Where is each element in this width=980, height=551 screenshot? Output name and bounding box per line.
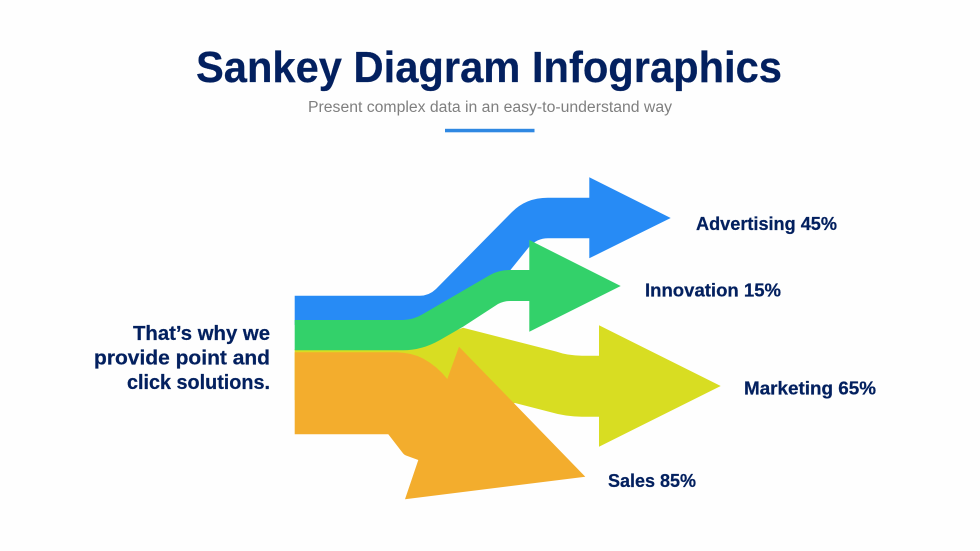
label: advertising: Advertising 45% [696, 213, 837, 234]
subtitle: Present complex data in an easy-to-understand way [308, 99, 672, 116]
side text block: provide point and [94, 346, 270, 370]
arrow: innovation (green) [295, 240, 621, 350]
side text block [94, 322, 270, 394]
sankey diagram [295, 177, 721, 499]
label: sales: Sales 85% [608, 470, 696, 491]
side text block: That’s why we [133, 322, 270, 345]
accent rule [445, 129, 534, 132]
label: marketing: Marketing 65% [744, 378, 876, 398]
arrow: sales (orange) [295, 347, 585, 499]
side text block: click solutions. [127, 371, 270, 394]
label: innovation: Innovation 15% [645, 280, 781, 300]
title: Sankey Diagram Infographics [196, 43, 782, 92]
arrow: advertising (blue) [295, 177, 671, 325]
arrow: marketing (yellow-green) [295, 325, 721, 447]
